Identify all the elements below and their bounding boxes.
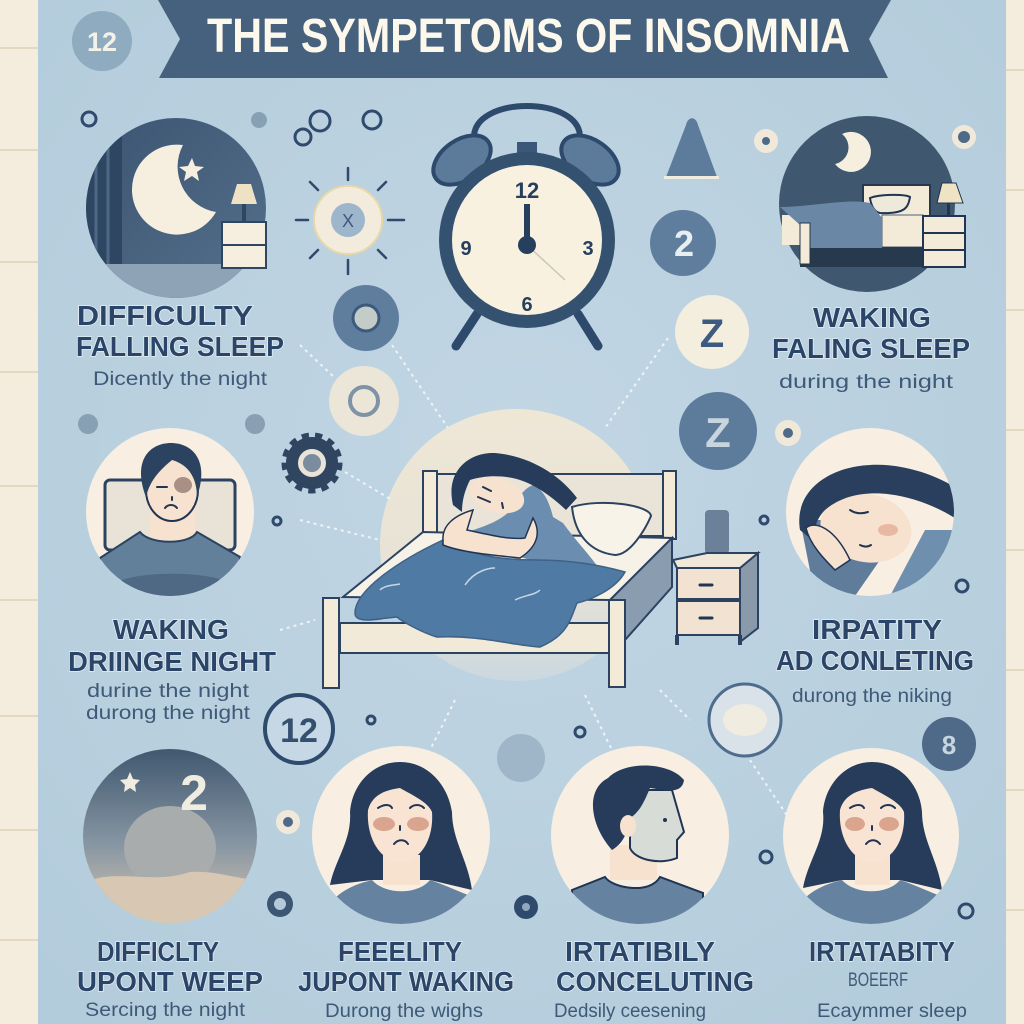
icon: sun: X: [342, 211, 354, 231]
icon: alarm clock: 6: [521, 294, 533, 316]
icon: sad woman: [312, 746, 490, 930]
badge: 2: [650, 210, 716, 276]
heading: DIFFICLTY: [97, 936, 219, 967]
icon: cloudy night: 2: [180, 765, 208, 821]
heading: IRTATIBILY: [565, 936, 715, 967]
badge: 2: 2: [674, 223, 694, 264]
bed frame: [323, 471, 676, 688]
panel: irritability concentrating: [551, 746, 754, 1022]
icon: sun: [296, 168, 404, 274]
heading: [298, 936, 514, 997]
icon: sleeping woman: [786, 428, 960, 596]
subtext: durong the night: [86, 703, 251, 724]
woman: [451, 453, 600, 570]
panel: irritability and concentrating: [776, 428, 974, 707]
title banner: [158, 0, 891, 78]
heading: DIFFICULTY: [77, 300, 253, 331]
decorative dots: [78, 111, 976, 919]
heading: FALING SLEEP: [772, 333, 970, 364]
heading: DRIINGE NIGHT: [68, 646, 276, 677]
heading: FEEELITY: [338, 936, 462, 967]
panel: difficulty upon sleep: [77, 749, 263, 1021]
panel: waking falling asleep: [772, 116, 970, 393]
badge: 8: [922, 717, 976, 771]
heading: IRPATITY: [812, 614, 942, 645]
badge: Z: [675, 295, 749, 369]
badge: 8: 8: [942, 730, 956, 760]
small label: BOEERF: [848, 970, 908, 991]
icon: alarm clock: [424, 106, 628, 346]
subtext: Sercing the night: [85, 1000, 246, 1021]
blanket: [355, 540, 625, 647]
heading: WAKING: [113, 614, 229, 645]
icon: lamp: [664, 118, 719, 179]
icon: tired man in bed: [86, 428, 254, 600]
heading: WAKING: [813, 302, 931, 333]
icon: sad woman 2: [783, 748, 959, 930]
icon: cloudy night: [83, 749, 260, 930]
subtext: durine the night: [87, 681, 250, 702]
badge: 12 ring: [265, 695, 333, 763]
badge: Z dark: Z: [705, 409, 731, 456]
icon: man profile: [551, 746, 729, 930]
heading: [772, 302, 970, 364]
heading: CONCELUTING: [556, 966, 754, 997]
subtext: Durong the wighs: [325, 1001, 483, 1022]
subtext: during the night: [779, 372, 954, 393]
badge: 12: 12: [87, 27, 117, 57]
icon: moon bedroom: [84, 115, 274, 298]
badge: 12: [72, 11, 132, 71]
subtext: [86, 681, 251, 724]
subtext: Ecaymmer sleep: [817, 1001, 967, 1022]
subtext: Dedsily ceesening: [554, 1001, 706, 1022]
badge: gear circle: [333, 285, 399, 351]
heading: [776, 614, 974, 676]
icon: bed at night: [779, 116, 965, 292]
heading: AD CONLETING: [776, 645, 974, 676]
heading: [76, 300, 284, 362]
badge: spiral: [329, 366, 399, 436]
title: THE SYMPETOMS OF INSOMNIA: [207, 10, 850, 63]
panel: irritability: [783, 748, 967, 1022]
subtext: Dicently the night: [93, 369, 268, 390]
arm: [443, 510, 537, 558]
badge: Z: Z: [700, 312, 724, 356]
badge: rock: [709, 684, 781, 756]
central illustration: woman in bed: [323, 409, 758, 688]
heading: [77, 936, 263, 997]
subtext: durong the niking: [792, 686, 952, 707]
icon: alarm clock: 9: [460, 238, 472, 260]
icon: gear: [285, 436, 339, 490]
pillow: [572, 503, 651, 555]
panel: feeling upon waking: [298, 746, 514, 1022]
heading: [556, 936, 754, 997]
nightstand: [673, 510, 758, 645]
panel: waking during the night: [68, 428, 276, 724]
heading: IRTATABITY: [809, 936, 955, 967]
icon: alarm clock: 3: [582, 238, 594, 260]
icon: alarm clock: 12: [515, 178, 539, 203]
panel: difficulty falling asleep: [76, 115, 284, 390]
orb: [497, 734, 545, 782]
badge: Z dark: [679, 392, 757, 470]
heading: FALLING SLEEP: [76, 331, 284, 362]
badge: 12 ring: 12: [280, 712, 318, 750]
heading: JUPONT WAKING: [298, 966, 514, 997]
heading: [68, 614, 276, 677]
connector lines: [280, 338, 790, 820]
heading: UPONT WEEP: [77, 966, 263, 997]
